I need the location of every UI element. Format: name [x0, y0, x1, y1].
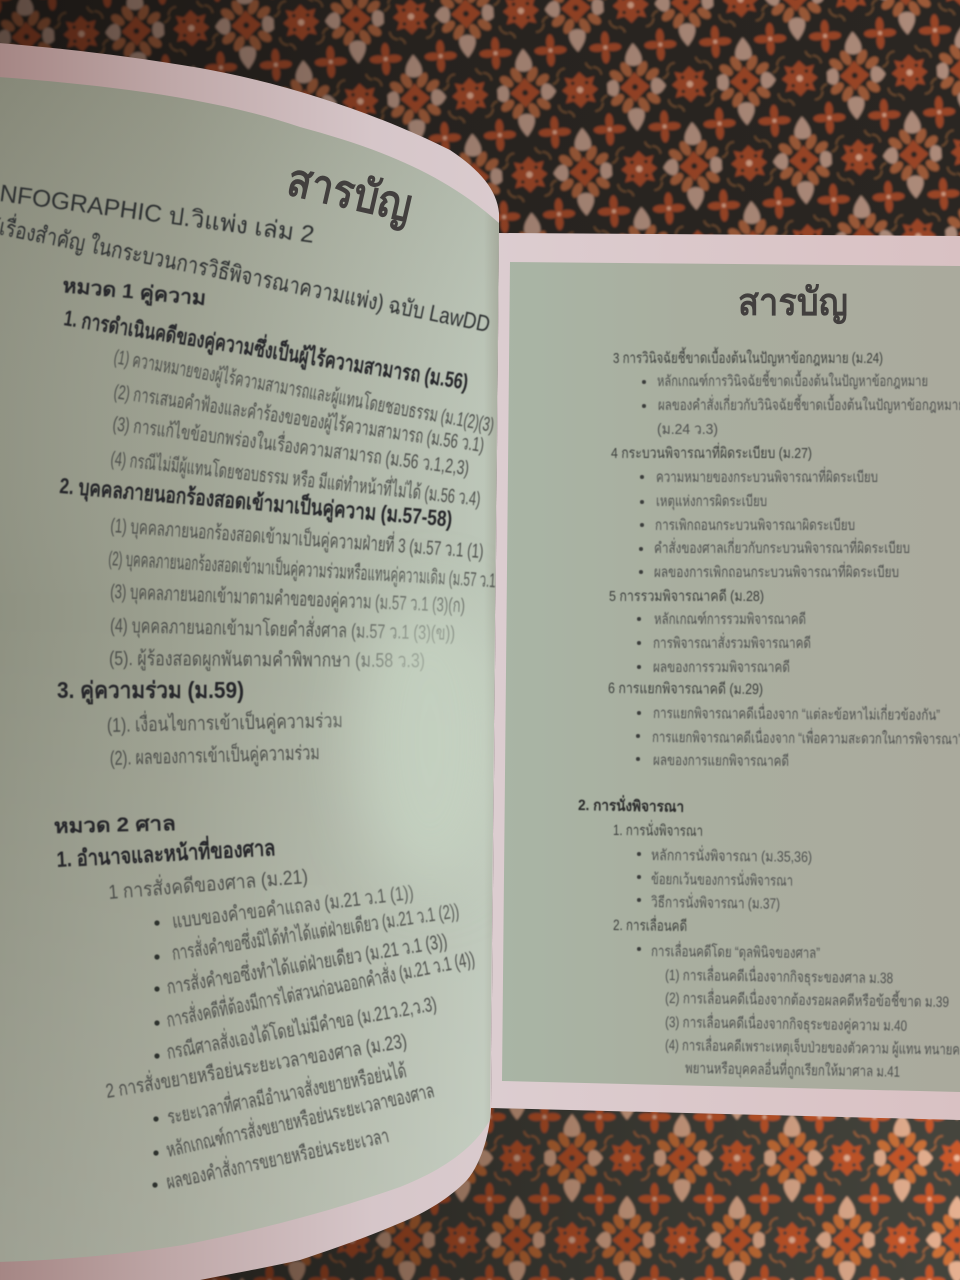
left page paper — [0, 43, 499, 1280]
right page text: section 2 sitting and postponement: การเลื่อนคดีโดย “ดุลพินิจของศาล” — [651, 940, 820, 963]
chapter 1: parties: (4) บุคคลภายนอกเข้ามาโดยคำสั่งศาล (ม.57 ว.1 (3)(ข)) — [110, 611, 455, 646]
right page text: sections 3 to 6: ผลของการรวมพิจารณาคดี — [653, 659, 790, 676]
chapter 2: court: หลักเกณฑ์การสั่งขยายหรือย่นระยะเวลาของศาล — [163, 1076, 436, 1162]
right page text: sections 3 to 6 — [608, 347, 960, 770]
chapter 1: parties: (5). ผู้ร้องสอดผูกพันตามคำพิพากษา (ม.58 ว.3) — [109, 648, 425, 673]
right page heading: สารบัญ — [738, 282, 848, 324]
left page heading: สารบัญ — [283, 153, 417, 233]
chapter 2: court: ระยะเวลาที่ศาลมีอำนาจสั่งขยายหรือย่นได้ — [165, 1056, 408, 1129]
chapter 1: parties: (4) กรณีไม่มีผู้แทนโดยชอบธรรม หรือ มีแต่ทำหน้าที่ไม่ได้ (ม.56 ว.4) — [109, 444, 482, 512]
right page text: sections 3 to 6: 3 การวินิจฉัยชี้ขาดเบื้องต้นในปัญหาข้อกฎหมาย (ม.24) — [613, 347, 883, 367]
chapter 2: court: แบบของคำขอคำแถลง (ม.21 ว.1 (1)) — [171, 882, 415, 933]
chapter 1: parties: (2) บุคคลภายนอกร้องสอดเข้ามาเป็นคู่ความร่วมหรือแทนคู่ความเดิม (ม.57 ว.1 — [108, 545, 497, 593]
chapter 1: parties: (3) การแก้ไขข้อบกพร่องในเรื่องความสามารถ (ม.56 ว.1,2,3) — [111, 409, 471, 480]
chapter 1: parties: (2) การเสนอคำฟ้องและคำร้องขอของผู้ไร้ความสามารถ (ม.56 ว.1) — [112, 380, 486, 458]
chapter 1: parties: (3) บุคคลภายนอกเข้ามาตามคำขอของคู่ความ (ม.57 ว.1 (3)(ก) — [110, 581, 465, 618]
right page text: sections 3 to 6: การพิจารณาสั่งรวมพิจารณาคดี — [653, 632, 811, 652]
right page paper — [491, 233, 960, 1120]
right page text: sections 3 to 6: (ม.24 ว.3) — [657, 421, 718, 438]
chapter 1: parties: 3. คู่ความร่วม (ม.59) — [57, 677, 244, 705]
right page green panel — [502, 262, 960, 1092]
right page text: sections 3 to 6: 6 การแยกพิจารณาคดี (ม.29) — [608, 680, 763, 698]
right page text: sections 3 to 6: เหตุแห่งการผิดระเบียบ — [656, 493, 767, 511]
right page text: sections 3 to 6: การเพิกถอนกระบวนพิจารณาผิดระเบียบ — [655, 517, 855, 534]
right page text: sections 3 to 6: 5 การรวมพิจารณาคดี (ม.28) — [609, 588, 764, 605]
right page text: section 2 sitting and postponement: 1. การนั่งพิจารณา — [613, 819, 703, 840]
chapter 2: court: การสั่งคำขอซึ่งทำได้แต่ฝ่ายเดียว (ม.21 ว.1 (3)) — [165, 926, 449, 999]
right page text: section 2 sitting and postponement: วิธีการนั่งพิจารณา (ม.37) — [650, 891, 780, 913]
right page text: section 2 sitting and postponement: ข้อยกเว้นของการนั่งพิจารณา — [651, 868, 793, 890]
right page text: sections 3 to 6: ความหมายของกระบวนพิจารณาที่ผิดระเบียบ — [656, 466, 878, 486]
chapter 1: parties: หมวด 1 คู่ความ — [61, 275, 207, 312]
right page text: sections 3 to 6: 4 กระบวนพิจารณาที่ผิดระเบียบ (ม.27) — [611, 442, 812, 462]
chapter 2: court: หมวด 2 ศาล — [54, 813, 176, 838]
chapter 2: court: 1. อำนาจและหน้าที่ของศาล — [56, 831, 276, 872]
chapter 2: court: การสั่งคดีที่ต้องมีการไต่สวนก่อนออกคำสั่ง (ม.21 ว.1 (4)) — [164, 944, 477, 1032]
chapter 1: parties: (1). เงื่อนไขการเข้าเป็นคู่ความร่วม — [107, 706, 343, 738]
chapter 1: parties: 1. การดำเนินคดีของคู่ความซึ่งเป็นผู้ไร้ความสามารถ (ม.56) — [62, 301, 471, 397]
panel: right page — [491, 233, 960, 1120]
chapter 1: parties: 2. บุคคลภายนอกร้องสอดเข้ามาเป็นคู่ความ (ม.57-58) — [58, 471, 453, 534]
right page text: section 2 sitting and postponement: หลักการนั่งพิจารณา (ม.35,36) — [651, 844, 812, 866]
left page green panel — [0, 77, 499, 1262]
right page text: sections 3 to 6: ผลของการเพิกถอนกระบวนพิจารณาที่ผิดระเบียบ — [654, 561, 899, 581]
right page text: sections 3 to 6: หลักเกณฑ์การรวมพิจารณาคดี — [654, 611, 806, 628]
chapter 1: parties: (1) บุคคลภายนอกร้องสอดเข้ามาเป็นคู่ความฝ่ายที่ 3 (ม.57 ว.1 (1) — [110, 511, 485, 564]
chapter 2: court — [54, 813, 477, 1194]
chapter 1: parties: (1) ความหมายของผู้ไร้ความสามารถและผู้แทนโดยชอบธรรม (ม.1(2)(3) — [112, 345, 496, 438]
chapter 2: court: 1 การสั่งคดีของศาล (ม.21) — [107, 862, 309, 904]
book title: INFOGRAPHIC ป.วิแพ่ง เล่ม 2 — [0, 179, 316, 249]
chapter 2: court: การสั่งคำขอซึ่งมิได้ทำได้แต่ฝ่ายเดียว (ม.21 ว.1 (2)) — [170, 896, 461, 965]
right page text: section 2 sitting and postponement: (1) การเลื่อนคดีเนื่องจากกิจธุระของศาล ม.38 — [665, 964, 893, 988]
right page text: section 2 sitting and postponement: พยานหรือบุคคลอื่นที่ถูกเรียกให้มาศาล ม.41 — [685, 1057, 900, 1082]
chapter 2: court: ผลของคำสั่งการขยายหรือย่นระยะเวลา — [164, 1121, 391, 1194]
chapter 1: parties: (2). ผลของการเข้าเป็นคู่ความร่วม — [109, 739, 320, 771]
chapter 2: court: 2 การสั่งขยายหรือย่นระยะเวลาของศาล (ม.23) — [103, 1026, 409, 1103]
panel: left page — [0, 43, 505, 1280]
chapter 2: court: กรณีศาลสั่งเองได้โดยไม่มีคำขอ (ม.21ว.2,ว.3) — [164, 989, 438, 1064]
book title: (เรื่องสำคัญ ในกระบวนการวิธีพิจารณาความแพ่ง) ฉบับ LawDD — [0, 209, 493, 337]
right page text: sections 3 to 6: ผลของการแยกพิจารณาคดี — [653, 752, 789, 770]
right page text: section 2 sitting and postponement: 2. การเลื่อนคดี — [613, 914, 687, 935]
right page text: section 2 sitting and postponement: 2. การนั่งพิจารณา — [578, 794, 684, 816]
chapter 1: parties — [57, 275, 497, 771]
book title — [0, 179, 493, 337]
page glare — [321, 568, 494, 914]
right page text: section 2 sitting and postponement — [578, 794, 960, 1082]
